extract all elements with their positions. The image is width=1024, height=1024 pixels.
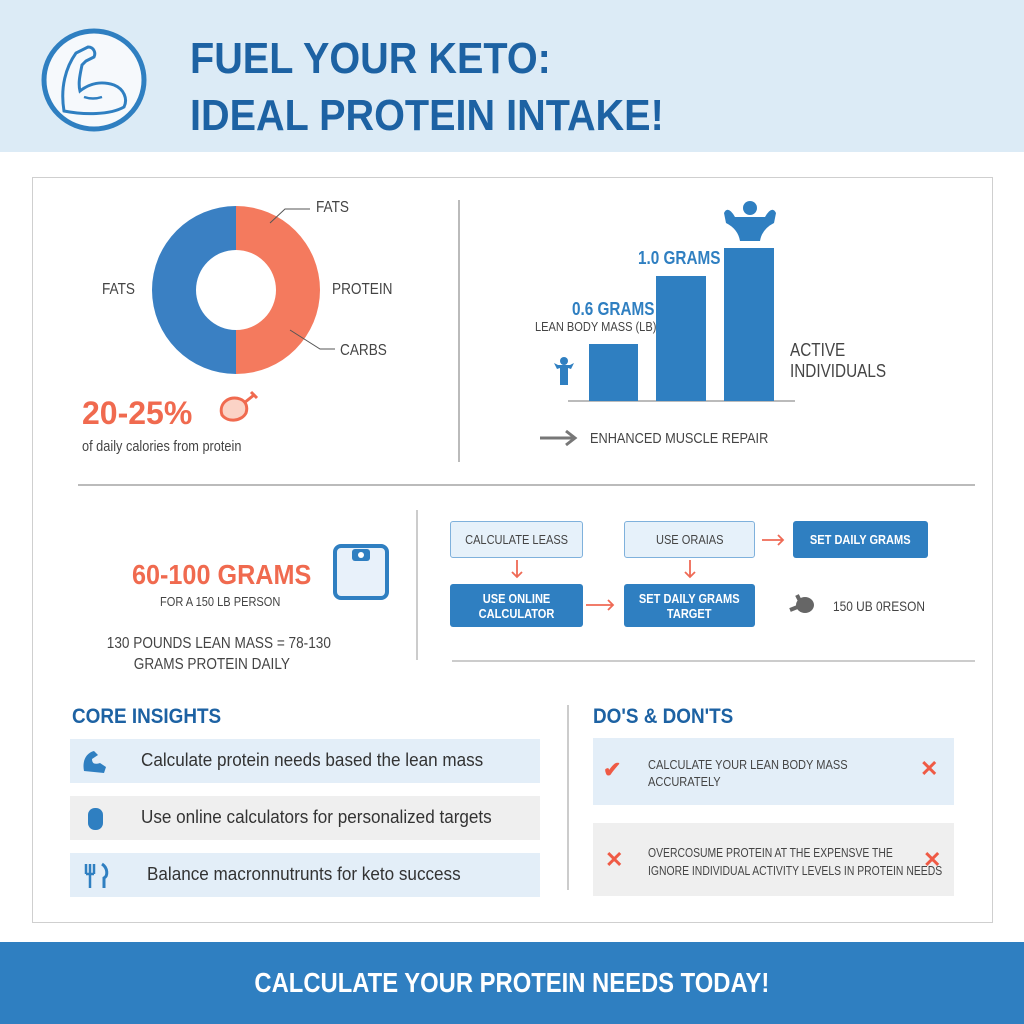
bar chart panel: 0.6 GRAMS [572,299,654,319]
don't item: IGNORE INDIVIDUAL ACTIVITY LEVELS IN PROTEIN NEEDS [648,863,942,878]
header band [0,0,1024,152]
flowchart: TARGET [667,606,712,620]
grams panel [107,544,389,673]
grams panel: FOR A 150 LB PERSON [160,594,280,609]
donut chart panel: PROTEIN [332,281,392,298]
panel: do's and don'ts: DO'S & DON'TS [593,705,733,728]
bar chart panel: LEAN BODY MASS (LB) [535,319,656,334]
divider [78,484,975,486]
grams panel: 60-100 GRAMS [132,559,311,590]
do item: CALCULATE YOUR LEAN BODY MASS [648,757,848,772]
flowchart [450,521,928,627]
divider [458,200,460,462]
insight 2 [70,796,540,840]
footer call to action [0,942,1024,1024]
divider [416,510,418,660]
grams panel: 130 POUNDS LEAN MASS = 78-130 [107,635,331,652]
do item: ✔ [603,757,621,782]
do item [593,738,954,805]
donut chart [152,206,335,374]
icon: chicken leg [220,391,258,422]
footer call to action: CALCULATE YOUR PROTEIN NEEDS TODAY! [255,967,769,998]
flowchart: CALCULATOR [479,606,554,620]
stat: 20-25%: 20-25% [82,395,192,431]
don't item: ✕ [605,847,623,872]
flowchart: CALCULATE LEASS [465,532,568,547]
panel: do's and don'ts [593,705,954,896]
donut chart panel [82,199,392,455]
don't item: ✕ [923,847,941,872]
title: IDEAL PROTEIN INTAKE! [190,91,664,140]
flowchart: USE ONLINE [483,590,550,606]
flowchart: 150 UB 0RESON [833,598,925,614]
bar chart panel: INDIVIDUALS [790,361,886,381]
insight 1: Calculate protein needs based the lean mass [141,750,483,770]
title: FUEL YOUR KETO: [190,34,551,83]
insight 3 [70,853,540,897]
donut chart panel: FATS [102,281,135,298]
flowchart: USE ORAIAS [656,532,723,547]
donut chart panel: CARBS [340,342,387,359]
divider [452,660,975,662]
bar chart panel: 1.0 GRAMS [638,248,720,268]
main panel frame [32,177,993,923]
panel: core insights [70,705,540,897]
don't item: OVERCOSUME PROTEIN AT THE EXPENSVE THE [648,845,893,860]
insight 3: Balance macronnutrunts for keto success [147,864,461,884]
icon: flexed arm badge [42,28,146,132]
insight 1 [70,739,540,783]
grams panel: GRAMS PROTEIN DAILY [134,656,290,673]
donut chart panel: FATS [316,199,349,216]
do item: ✕ [920,756,938,781]
icon: scale [333,544,389,600]
icon: big flexing figure [724,201,776,241]
title [190,34,664,140]
flowchart: SET DAILY GRAMS [639,590,740,606]
flowchart: SET DAILY GRAMS [810,532,911,547]
do item: ACCURATELY [648,774,721,789]
bar chart panel [535,201,886,447]
don't item [593,823,954,896]
icon: small figure [554,357,574,385]
donut chart panel: of daily calories from protein [82,438,241,455]
bar chart panel: ACTIVE [790,340,845,360]
panel: core insights: CORE INSIGHTS [72,705,221,728]
divider [567,705,568,890]
bar chart panel: ENHANCED MUSCLE REPAIR [590,430,768,447]
insight 2: Use online calculators for personalized targets [141,807,492,827]
